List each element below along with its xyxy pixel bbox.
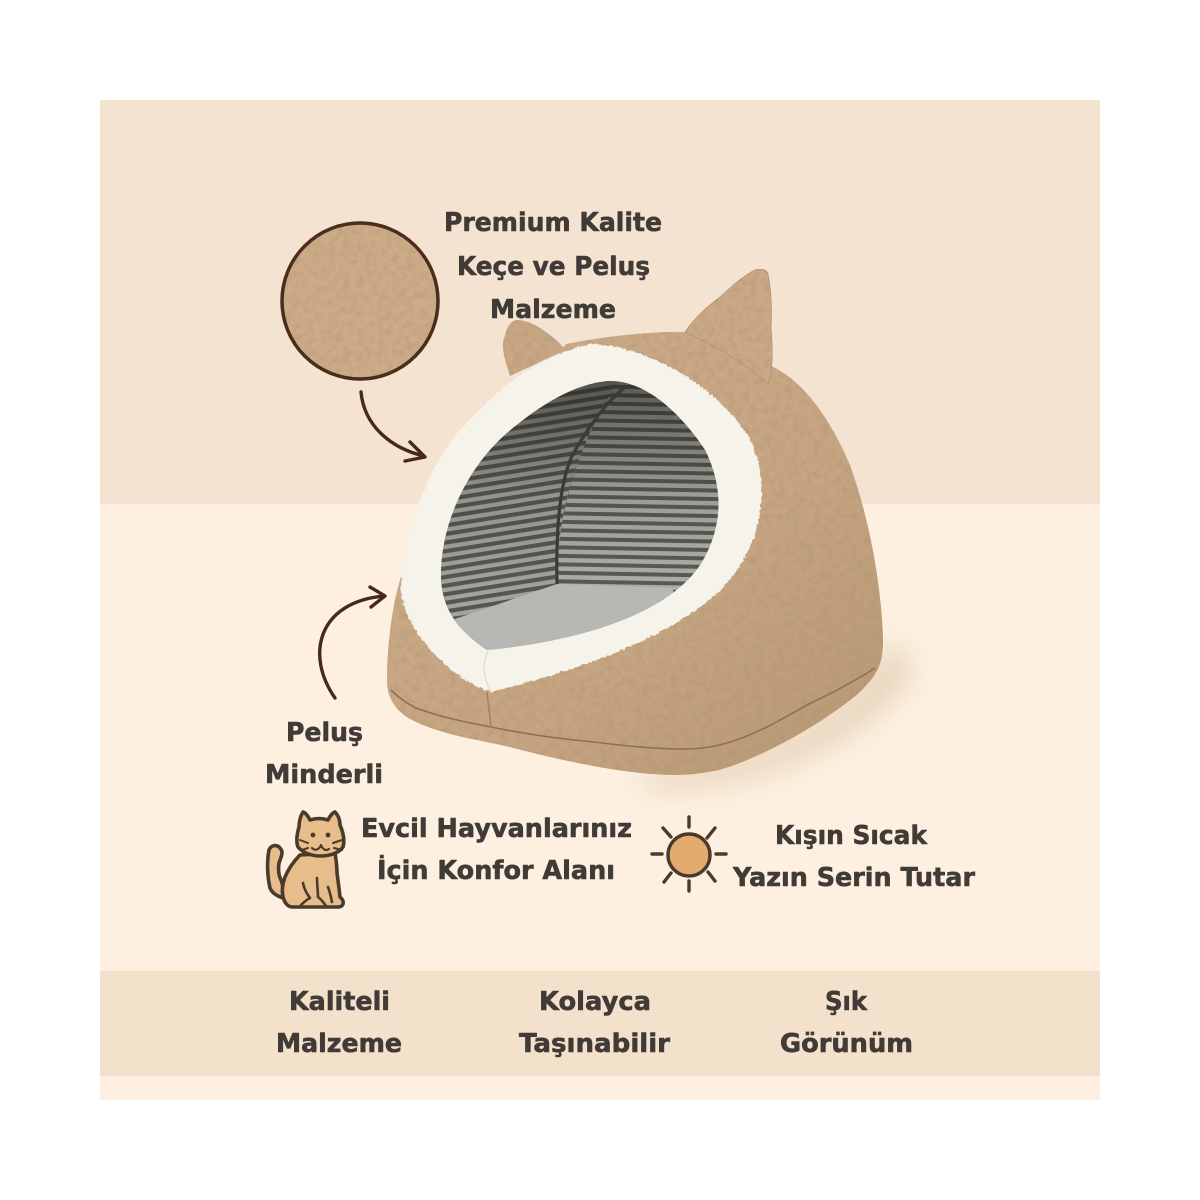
panel: wall background — [100, 100, 1100, 504]
heading: premium material — [444, 208, 662, 325]
left ear — [503, 320, 566, 376]
infographic canvas — [100, 100, 1100, 1100]
feature: quality material: Kaliteli — [289, 987, 390, 1017]
left wall stripes — [441, 381, 618, 627]
text: warm in winter, cool in summer — [732, 821, 975, 893]
striped interior — [441, 381, 718, 650]
text: comfort area: Evcil Hayvanlarınız — [361, 814, 632, 844]
feature: stylish look — [780, 987, 913, 1059]
grey cushion — [454, 584, 674, 650]
label: plush cushion — [265, 718, 383, 790]
feature: stylish look: Görünüm — [780, 1029, 913, 1059]
arrow: swatch to cat house — [361, 392, 425, 461]
text: warm in winter, cool in summer: Yazın Serin Tutar — [732, 863, 975, 893]
label: plush cushion: Minderli — [265, 760, 383, 790]
vertical seam — [487, 692, 491, 727]
right wall stripes — [558, 382, 718, 602]
feature: easy to carry: Kolayca — [539, 987, 651, 1017]
panel: floor background — [100, 504, 1100, 1100]
feature: easy to carry: Taşınabilir — [519, 1029, 670, 1059]
heading: premium material: Keçe ve Peluş — [457, 252, 650, 282]
icon: cat — [268, 812, 344, 907]
feature: quality material: Malzeme — [276, 1029, 402, 1059]
feature: stylish look: Şık — [825, 987, 868, 1017]
arrow: cushion label to cat house — [320, 587, 385, 698]
icon: sun — [652, 817, 726, 891]
ground shadow — [640, 640, 915, 790]
interior shadow — [445, 381, 718, 548]
panel: bottom feature band — [100, 971, 1100, 1076]
label: plush cushion: Peluş — [286, 718, 363, 748]
house body — [387, 332, 883, 775]
text: comfort area — [361, 814, 632, 886]
felt texture swatch circle — [282, 223, 438, 379]
plush fur rim — [401, 344, 762, 692]
feature: quality material — [276, 987, 402, 1059]
text: comfort area: İçin Konfor Alanı — [377, 854, 615, 886]
text: warm in winter, cool in summer: Kışın Sıcak — [775, 821, 928, 851]
fur collar end — [484, 651, 491, 692]
right ear — [685, 269, 772, 384]
heading: premium material: Premium Kalite — [444, 208, 662, 238]
heading: premium material: Malzeme — [490, 295, 616, 325]
feature: easy to carry — [519, 987, 670, 1059]
base seam — [391, 668, 875, 749]
inner seam — [557, 386, 626, 584]
cat house product illustration — [387, 269, 915, 790]
